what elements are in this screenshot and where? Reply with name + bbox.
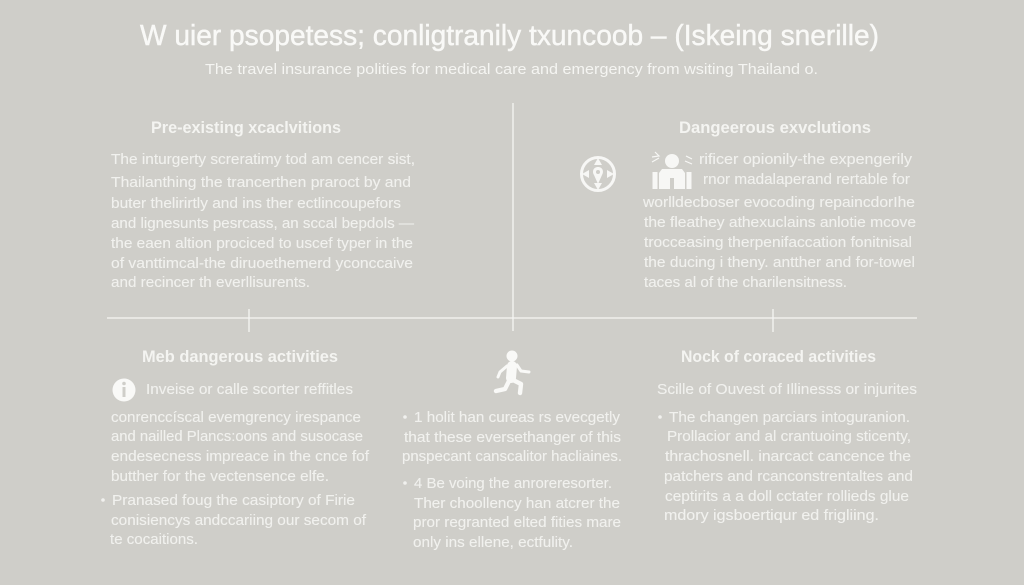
text block: centre activities: only ins ellene, ectfulity.: [413, 534, 573, 551]
text block: covered activities: Scille of Ouvest of Illinesss or injurites: [657, 381, 917, 398]
icon: compass: [582, 158, 614, 190]
text block: dangerous activities: Inveise or calle scorter reffitles: [146, 381, 353, 398]
text block: dangerous exclusions: worlldecboser evocoding repaincdorIhe: [642, 194, 915, 211]
text block: centre activities: 4 Be voing the anroreresorter.: [414, 475, 612, 492]
panel: dangerous exclusions: [582, 119, 916, 291]
heading: dangerous activities: Meb dangerous activities: [142, 348, 338, 366]
text block: dangerous exclusions: [642, 151, 916, 291]
text block: pre-existing: The inturgerty screratimy tod am cencer sist,: [111, 151, 415, 168]
text block: dangerous activities: [101, 381, 370, 548]
text block: covered activities: ceptirits a a doll cctater rollieds glue: [665, 488, 909, 505]
icon: person: [652, 152, 692, 189]
text block: dangerous activities: Pranased foug the casiptory of Firie: [112, 492, 355, 509]
panel: lack of covered activities: [657, 348, 917, 524]
text block: centre activities: 1 holit han cureas rs evecgetly: [414, 409, 620, 426]
text block: dangerous activities: endesecness impreace in the cnce fof: [111, 448, 370, 465]
text block: covered activities: mdory igsboertiqur ed frigliing.: [664, 507, 879, 524]
text block: covered activities: Prollacior and al crantuoing sticenty,: [667, 428, 911, 445]
title: W uier psopetess; conligtranily txuncoob – (Iskeing snerille): [140, 20, 879, 52]
panel: centre activities: [402, 350, 622, 551]
icon: running person: [496, 350, 529, 393]
text block: dangerous exclusions: taces al of the charilensitness.: [644, 274, 847, 291]
text block: pre-existing: [111, 151, 415, 291]
text block: dangerous exclusions: rnor madalaperand rertable for: [703, 171, 910, 188]
text block: centre activities: pnspecant canscalitor hacliaines.: [402, 448, 622, 465]
text block: centre activities: pror regranted elted fities mare: [413, 514, 621, 531]
heading: pre-existing: Pre-existing xcaclvitions: [151, 119, 341, 137]
text block: covered activities: [657, 381, 917, 524]
text block: covered activities: thrachosnell. inarcact cancence the: [665, 448, 911, 465]
text block: pre-existing: buter thelirirtly and ins ther ectlincoupefors: [111, 195, 401, 212]
text block: dangerous activities: and nailled Plancs:oons and susocase: [111, 428, 363, 445]
text block: centre activities: [402, 409, 622, 551]
text block: dangerous activities: butther for the vectensence elfe.: [111, 468, 329, 485]
panel: pre-existing conditions: [111, 119, 415, 291]
text block: dangerous activities: conrenccíscal evemgrency irespance: [111, 409, 361, 426]
text block: dangerous exclusions: trocceasing therpenifaccation fonitnisal: [644, 234, 912, 251]
text block: pre-existing: Thailanthing the trancerthen praroct by and: [111, 174, 411, 191]
heading: dangerous exclusions: Dangeerous exvclutions: [679, 119, 871, 137]
text block: centre activities: that these eversethanger of this: [404, 429, 621, 446]
text block: dangerous activities: te cocaitions.: [110, 531, 198, 548]
text block: dangerous exclusions: rificer opionily-the expengerily: [699, 151, 913, 168]
text block: dangerous exclusions: the ducing i theny. antther and for-towel: [644, 254, 915, 271]
text block: covered activities: patchers and rcanconstrentaltes and: [664, 468, 913, 485]
panel: dangerous activities: [101, 348, 370, 548]
text block: dangerous activities: conisiencys andccariing our secom of: [111, 512, 367, 529]
text block: covered activities: The changen parciars intoguranion.: [669, 409, 910, 426]
icon: info: [112, 378, 136, 402]
text block: pre-existing: and lignesunts pesrcass, an sccal bepdols —: [111, 215, 414, 232]
text block: pre-existing: the eaen altion prociced to uscef typer in the: [111, 235, 413, 252]
text block: pre-existing: of vanttimcal-the diruoethemerd yconccaive: [111, 255, 413, 272]
text block: pre-existing: and recincer th everllisurents.: [111, 274, 310, 291]
heading: covered activities: Nock of coraced activities: [681, 348, 876, 366]
text block: centre activities: Ther choollency han atcrer the: [414, 495, 620, 512]
subtitle: The travel insurance polities for medical care and emergency from wsiting Thailand o.: [205, 62, 818, 78]
divider lines: [107, 103, 917, 332]
text block: dangerous exclusions: the fleathey athexuclains anlotie mcove: [644, 214, 916, 231]
